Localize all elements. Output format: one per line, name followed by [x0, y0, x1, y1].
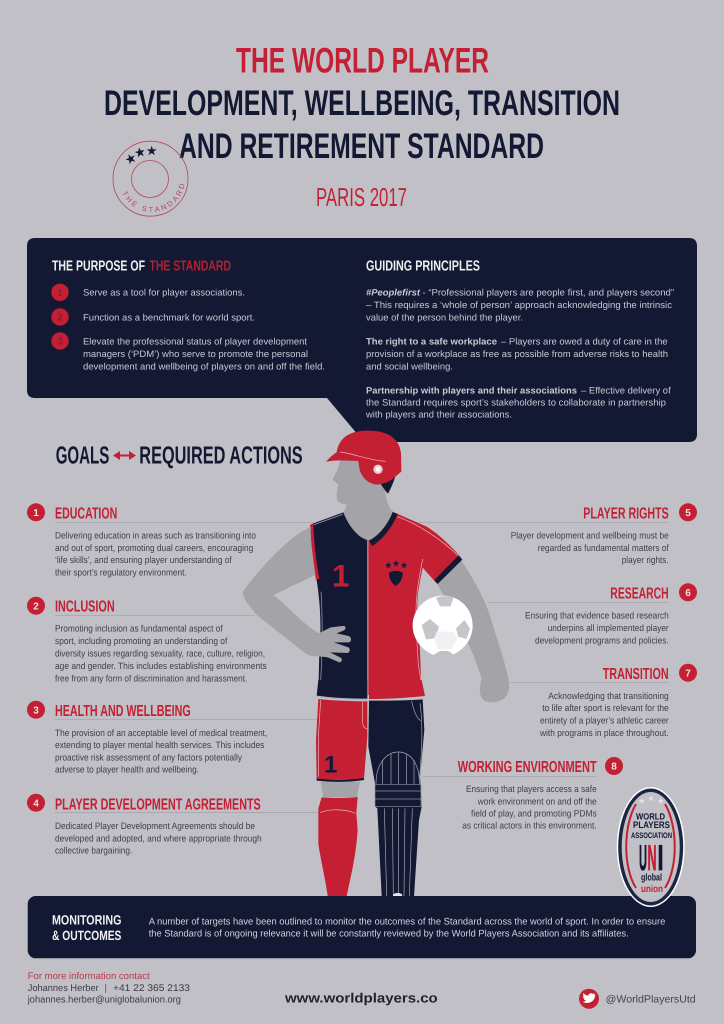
logo: World Players Association and UNI global union: N	[648, 837, 656, 878]
purpose item 1: Serve as a tool for player associations.	[83, 288, 245, 298]
goal 1: education	[27, 503, 256, 578]
arrow: double headed	[113, 451, 136, 460]
goal 6: research: Ensuring that evidence based research	[525, 611, 669, 621]
title: AND RETIREMENT STANDARD	[179, 126, 544, 166]
bare knee	[321, 782, 360, 797]
goal 3: health and wellbeing: HEALTH AND WELLBEING	[55, 703, 191, 720]
goal 1: education: their sport’s regulatory environment.	[55, 568, 187, 578]
goal 3: health and wellbeing: The provision of an acceptable level of medical treatment,	[55, 728, 267, 738]
principle: safe workplace: – Players are owed a duty of care in the	[501, 337, 668, 347]
player shorts and legs	[316, 680, 425, 898]
goal 4: player development agreements: 4	[33, 798, 39, 809]
goal 4: player development agreements	[27, 794, 262, 856]
goal 8: working environment	[458, 757, 623, 831]
jersey crest	[385, 560, 407, 586]
heading: monitoring and outcomes: MONITORING	[52, 912, 121, 927]
goal 5: player rights: 5	[685, 508, 691, 519]
hair	[380, 474, 396, 494]
logo: World Players Association and UNI global union: ASSOCIATION	[631, 831, 672, 840]
heading: monitoring and outcomes: & OUTCOMES	[52, 928, 121, 943]
goal 3: health and wellbeing: proactive risk assessment of any factors potentially	[55, 752, 242, 762]
navy trouser and shin pad	[368, 699, 424, 896]
goal 7: transition	[539, 664, 697, 738]
goal 7: transition: TRANSITION	[603, 666, 669, 683]
purpose item 3: managers (‘PDM’) who serve to promote the personal	[83, 349, 308, 359]
purpose item 2: Function as a benchmark for world sport.	[83, 313, 255, 323]
goal 1: education: 1	[33, 508, 39, 519]
goal 7: transition: to life after sport is relevant for the	[542, 703, 669, 713]
goal 4: player development agreements: Dedicated Player Development Agreements should be	[55, 821, 255, 831]
purpose item 1	[51, 284, 245, 301]
goal 1: education: ‘life skills’, and ensuring player understanding of	[55, 555, 232, 565]
football	[413, 596, 473, 655]
goal 7: transition: entirety of a player’s athletic career	[540, 716, 669, 726]
logo: World Players Association and UNI global union: PLAYERS	[633, 820, 670, 831]
logo: World Players Association and UNI global union: U	[639, 837, 647, 878]
goal 2: inclusion: INCLUSION	[55, 599, 115, 616]
illustration: player figure	[243, 431, 509, 898]
goal 8: working environment: work environment on and off the	[477, 796, 597, 806]
logo: World Players Association and UNI global union	[617, 787, 685, 907]
principle: people first: value of the person behind the player.	[366, 312, 523, 322]
principle: people first: – This requires a ‘whole of person’ approach acknowledging the intrinsic	[366, 300, 672, 310]
principle: partnership: – Effective delivery of	[581, 385, 671, 395]
icon: twitter	[579, 989, 599, 1009]
goal 3: health and wellbeing: 3	[33, 705, 39, 716]
logo: World Players Association and UNI global union: global	[641, 872, 662, 884]
purpose item 3: Elevate the professional status of player development	[83, 337, 307, 347]
website: www.worldplayers.co	[284, 990, 438, 1005]
goal 5: player rights: PLAYER RIGHTS	[583, 506, 669, 523]
panel: purpose and guiding principles	[27, 238, 697, 442]
heading: purpose of the standard: THE PURPOSE OF	[52, 259, 145, 275]
goal 7: transition: 7	[685, 668, 691, 679]
principle: people first	[366, 288, 674, 322]
goal 5: player rights: regarded as fundamental matters of	[538, 543, 669, 553]
contact details: For more information contact	[28, 971, 150, 982]
principle: partnership	[365, 385, 671, 420]
heading: monitoring and outcomes	[52, 912, 121, 943]
goal 7: transition: Acknowledging that transitioning	[548, 691, 669, 701]
goal 3: health and wellbeing: extending to player mental health services. This includes	[55, 740, 265, 750]
goal 8: working environment: field of play, and promoting PDMs	[471, 809, 597, 819]
heading: purpose of the standard: THE STANDARD	[150, 259, 231, 275]
goal 6: research: 6	[685, 588, 691, 599]
jersey hem	[317, 680, 367, 699]
panel: monitoring and outcomes	[28, 896, 696, 958]
goal 6: research	[525, 583, 697, 645]
goal 6: research: underpins all implemented player	[548, 623, 669, 633]
goal 8: working environment: as critical actors in this environment.	[462, 821, 597, 831]
icon: The Standard badge	[112, 140, 188, 217]
icon: The Standard badge: THE STANDARD	[122, 184, 184, 212]
contact details: |	[104, 983, 107, 994]
goal 2: inclusion: diversity issues regarding sexuality, race, culture, religion,	[55, 649, 265, 659]
jersey left navy half	[313, 512, 367, 695]
logo: World Players Association and UNI global union: union	[641, 884, 663, 895]
goal 2: inclusion: free from any form of discrimination and harassment.	[55, 674, 247, 684]
heading: goals and required actions: GOALS	[56, 443, 109, 470]
contact details: johannes.herber@uniglobalunion.org	[27, 995, 181, 1006]
subtitle: Paris 2017: PARIS 2017	[316, 182, 407, 212]
goal 3: health and wellbeing: adverse to player health and wellbeing.	[55, 765, 199, 775]
principle: safe workplace: and social wellbeing.	[366, 362, 453, 372]
principle: safe workplace: provision of a workplace as free as possible from adverse risks to health	[366, 349, 668, 359]
goal 2: inclusion: 2	[33, 601, 39, 612]
left arm with hand on hip	[243, 527, 351, 662]
goal 2: inclusion	[27, 597, 267, 684]
heading: guiding principles: GUIDING PRINCIPLES	[366, 259, 480, 275]
title: THE WORLD PLAYER	[236, 40, 489, 80]
goal 4: player development agreements: developed and adopted, and where appropriate through	[55, 833, 262, 843]
purpose item 3: 3	[57, 337, 63, 348]
helmet	[326, 431, 401, 484]
principle: partnership: with players and their associations.	[365, 410, 512, 420]
logo: World Players Association and UNI global union: WORLD	[636, 812, 665, 822]
red shorts	[316, 699, 367, 780]
goal 8: working environment: WORKING ENVIRONMENT	[458, 759, 597, 776]
goal 1: education: and out of sport, promoting dual careers, encouraging	[55, 543, 253, 553]
player shorts and legs: 1	[324, 751, 337, 778]
jersey number: 1	[332, 558, 349, 593]
goal 1: education: EDUCATION	[55, 506, 117, 523]
heading: goals and required actions: REQUIRED ACTIONS	[139, 443, 303, 470]
goal 2: inclusion: sport, including promoting an understanding of	[55, 636, 228, 646]
contact details: +41 22 365 2133	[113, 983, 190, 994]
right arm	[437, 558, 509, 702]
principle: partnership: Partnership with players and their associations	[366, 385, 577, 395]
twitter handle: @WorldPlayersUtd	[606, 993, 696, 1005]
purpose item 3	[51, 332, 325, 371]
goal 6: research: RESEARCH	[610, 586, 669, 603]
purpose item 2: 2	[57, 313, 63, 324]
purpose item 1: 1	[57, 288, 63, 299]
goal 5: player rights: player rights.	[622, 555, 669, 565]
goal 8: working environment: Ensuring that players access a safe	[466, 784, 597, 794]
principle: people first: - “Professional players are people first, and players second”	[422, 288, 674, 298]
goal 4: player development agreements: collective bargaining.	[55, 846, 132, 856]
goal 3: health and wellbeing	[27, 701, 267, 775]
goal 2: inclusion: age and gender. This includes establishing environments	[55, 661, 267, 671]
goal 1: education: Delivering education in areas such as transitioning into	[55, 530, 256, 540]
purpose item 2	[51, 308, 255, 326]
head and neck	[333, 460, 394, 541]
principle: safe workplace: The right to a safe workplace	[366, 337, 497, 347]
goal 2: inclusion: Promoting inclusion as fundamental aspect of	[55, 624, 223, 634]
contact details: Johannes Herber	[28, 983, 99, 994]
monitoring text: A number of targets have been outlined to monitor the outcomes of the Standard across the world of sport. In order to ensure	[149, 916, 665, 927]
purpose item 3: development and wellbeing of players on and off the field.	[83, 361, 325, 371]
principle: people first: #Peoplefirst	[366, 288, 421, 298]
monitoring text	[149, 916, 665, 940]
goal 5: player rights	[511, 503, 697, 565]
red sock	[318, 797, 358, 896]
heading: goals and required actions	[56, 443, 303, 470]
principle: partnership: the Standard requires sport’s stakeholders to collaborate in partnership	[366, 397, 666, 407]
title	[104, 40, 620, 166]
goal 6: research: development programs and policies.	[535, 635, 669, 645]
goal 8: working environment: 8	[611, 762, 617, 773]
jersey right red half	[368, 512, 462, 695]
goal 7: transition: with programs in place throughout.	[539, 728, 669, 738]
monitoring text: the Standard is of ongoing relevance it will be constantly reviewed by the World Players Association and its affiliates.	[149, 928, 629, 940]
player upper body	[243, 431, 509, 702]
principle: safe workplace	[366, 337, 668, 372]
logo: World Players Association and UNI global union: I	[658, 837, 664, 878]
goal 4: player development agreements: PLAYER DEVELOPMENT AGREEMENTS	[55, 796, 261, 813]
contact details	[27, 971, 190, 1006]
goal 5: player rights: Player development and wellbeing must be	[511, 530, 669, 540]
